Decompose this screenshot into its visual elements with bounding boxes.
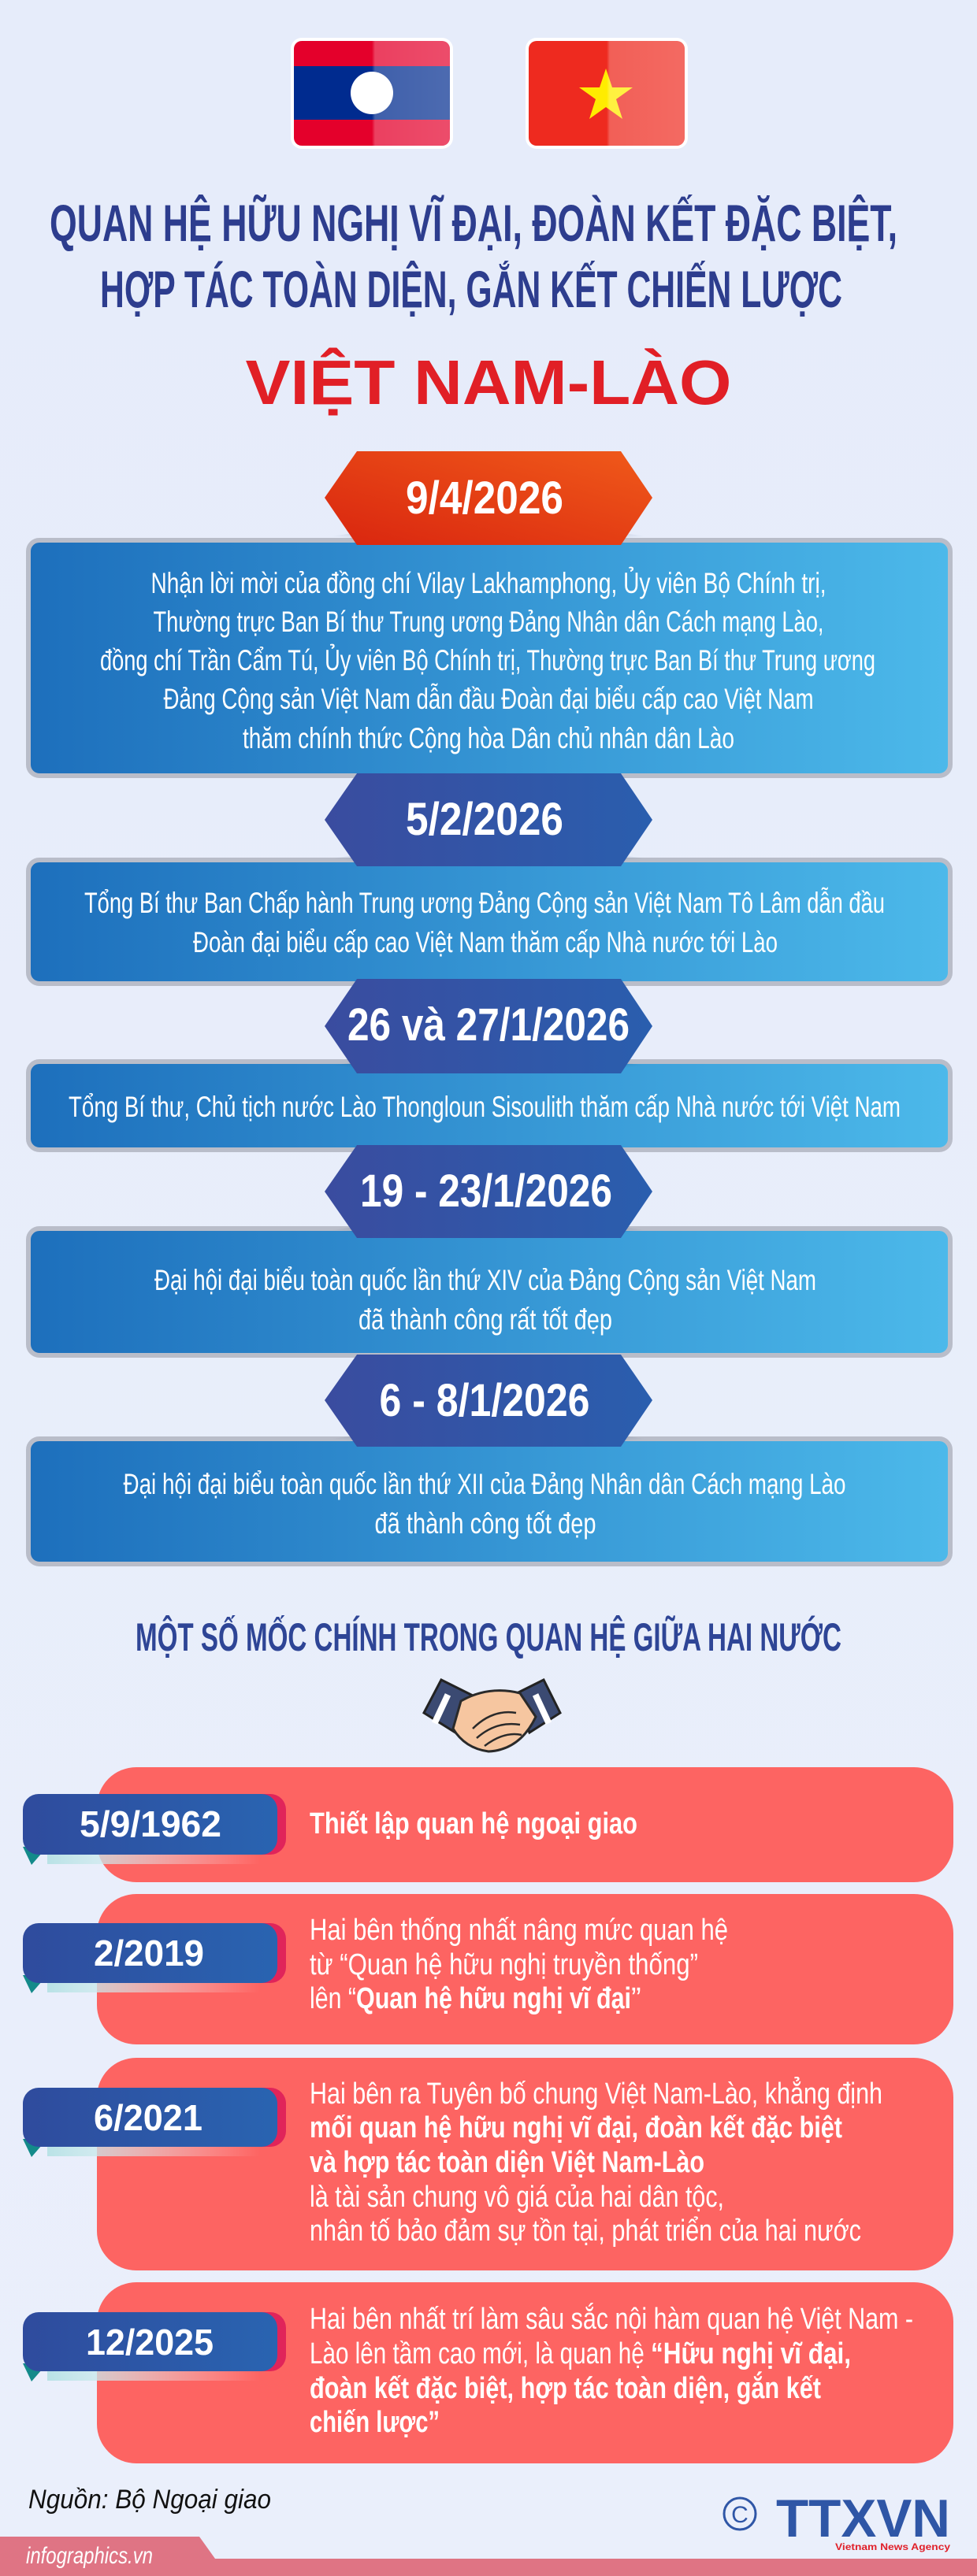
milestone: 6/2021: nhân tố bảo đảm sự tồn tại, phát triển của hai nước xyxy=(310,2215,861,2248)
milestone: 6/2021: và hợp tác toàn diện Việt Nam-Lào xyxy=(310,2146,704,2179)
milestone: 6/2021: mối quan hệ hữu nghị vĩ đại, đoàn kết đặc biệt xyxy=(310,2111,842,2144)
milestone: 2/2019 xyxy=(23,1894,953,2044)
footer xyxy=(0,2537,977,2576)
logo: TTXVN: TTXVN xyxy=(776,2489,950,2548)
panel: 19 - 23/1/2026 xyxy=(28,1145,950,1355)
panel: 5/2/2026: 5/2/2026 xyxy=(406,794,563,845)
panel: 19 - 23/1/2026: đã thành công rất tốt đẹp xyxy=(358,1303,612,1336)
panel: 19 - 23/1/2026: 19 - 23/1/2026 xyxy=(360,1166,612,1217)
milestone: 12/2025: 12/2025 xyxy=(86,2322,214,2363)
panel: 9/4/2026: 9/4/2026 xyxy=(406,473,563,524)
panel: 9/4/2026 xyxy=(28,451,950,776)
panel: 6 - 8/1/2026: 6 - 8/1/2026 xyxy=(380,1375,589,1426)
title: VIỆT NAM-LÀO xyxy=(246,347,731,417)
panel: 26 và 27/1/2026 xyxy=(28,979,950,1150)
milestone: 2/2019: từ “Quan hệ hữu nghị truyền thống” xyxy=(310,1948,698,1981)
milestone: 2/2019: lên “Quan hệ hữu nghị vĩ đại” xyxy=(310,1982,641,2015)
milestone: 5/9/1962: Thiết lập quan hệ ngoại giao xyxy=(310,1807,637,1840)
milestone: 6/2021: 6/2021 xyxy=(94,2097,202,2138)
milestone: 2/2019: Hai bên thống nhất nâng mức quan hệ xyxy=(310,1914,728,1947)
milestone: 5/9/1962 xyxy=(23,1767,953,1882)
panel: 5/2/2026: Đoàn đại biểu cấp cao Việt Nam thăm cấp Nhà nước tới Lào xyxy=(193,926,778,958)
milestone: 12/2025: chiến lược” xyxy=(310,2406,440,2439)
footer: infographics.vn xyxy=(26,2543,153,2569)
flag: Laos xyxy=(291,38,453,149)
milestone: 6/2021: là tài sản chung vô giá của hai dân tộc, xyxy=(310,2181,724,2214)
milestone: 2/2019: 2/2019 xyxy=(94,1933,204,1974)
panel: 9/4/2026: thăm chính thức Cộng hòa Dân chủ nhân dân Lào xyxy=(243,722,734,754)
milestone: 12/2025 xyxy=(23,2282,953,2463)
title xyxy=(50,194,897,417)
icon: handshake xyxy=(424,1680,560,1751)
milestone: 12/2025: Lào lên tầm cao mới, là quan hệ “Hữu nghị vĩ đại, xyxy=(310,2337,851,2370)
flag: Vietnam xyxy=(526,38,688,149)
panel: 5/2/2026 xyxy=(28,773,950,984)
logo: TTXVN: Vietnam News Agency xyxy=(835,2541,950,2552)
panel: 6 - 8/1/2026 xyxy=(28,1355,950,1564)
logo: TTXVN: C xyxy=(731,2502,749,2528)
milestone: 12/2025: đoàn kết đặc biệt, hợp tác toàn diện, gắn kết xyxy=(310,2370,821,2405)
source: Nguồn: Bộ Ngoại giao xyxy=(28,2485,271,2515)
panel: 26 và 27/1/2026: 26 và 27/1/2026 xyxy=(347,999,630,1051)
milestone: 6/2021 xyxy=(23,2058,953,2270)
panel: 6 - 8/1/2026: đã thành công tốt đẹp xyxy=(375,1507,596,1540)
milestone: 5/9/1962: 5/9/1962 xyxy=(80,1803,221,1844)
